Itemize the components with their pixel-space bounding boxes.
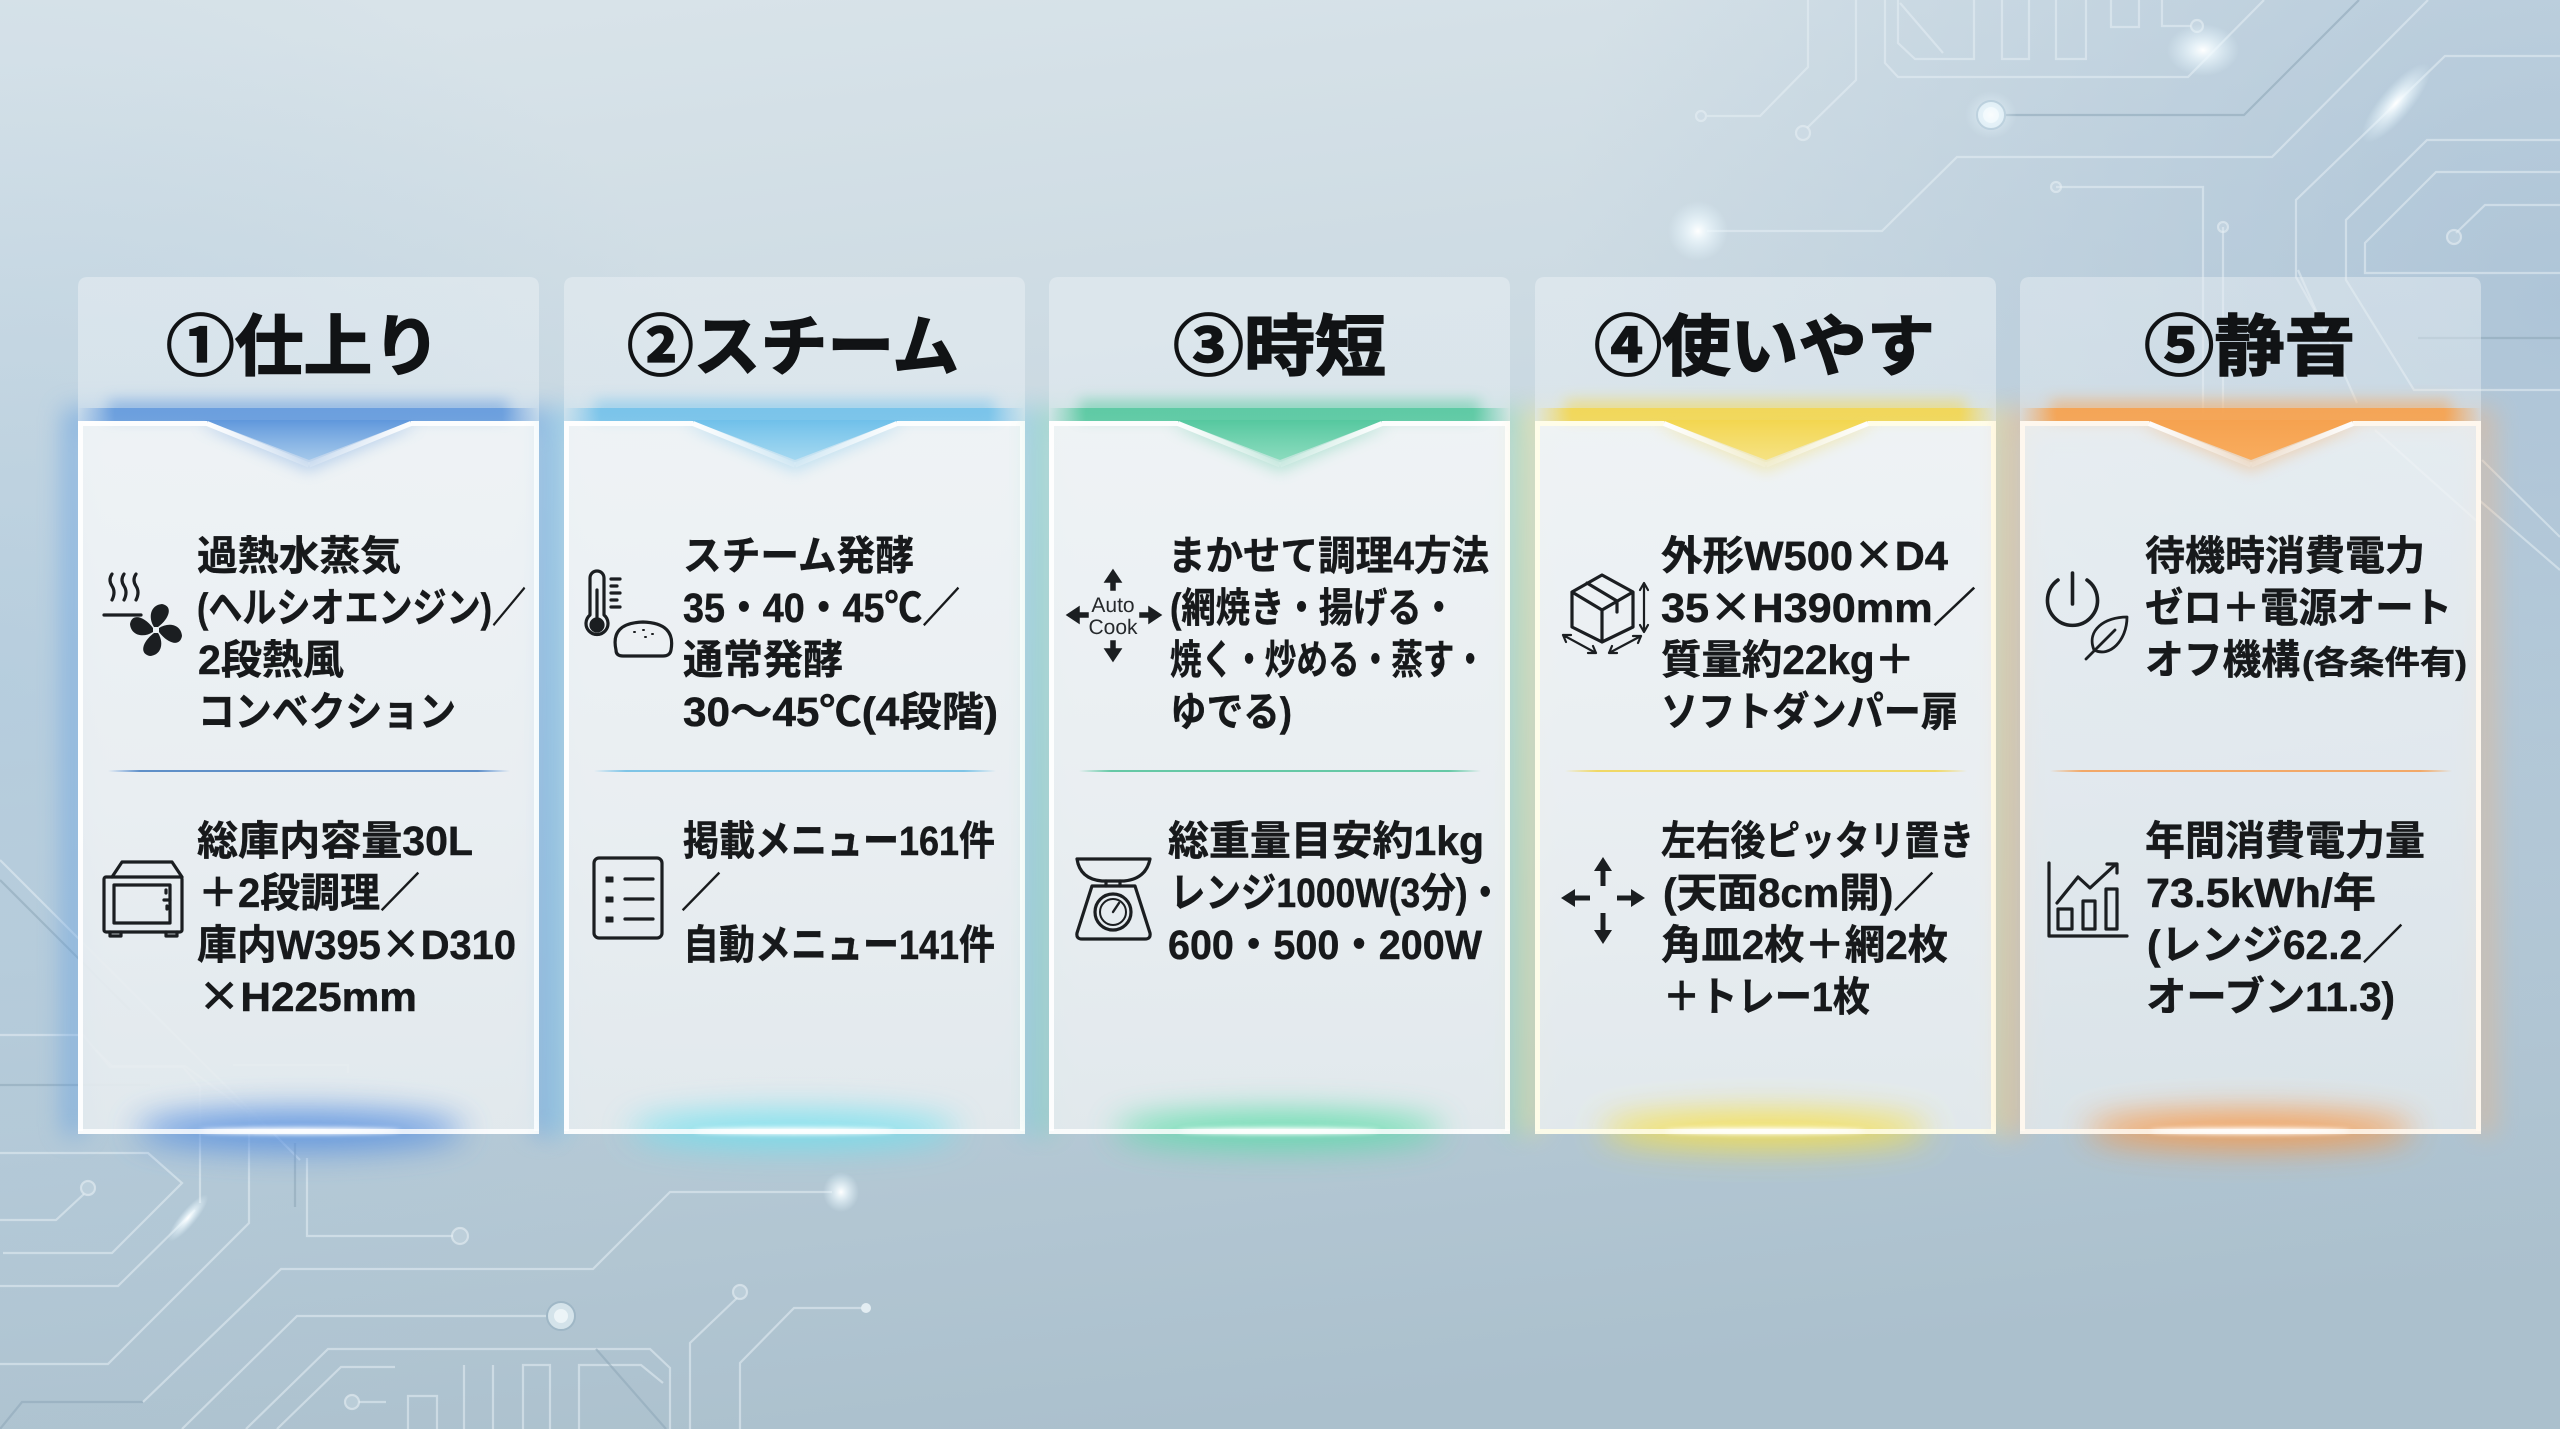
panel frame: sky blue [560,277,1029,1148]
panel: ⑤静音 [2016,277,2485,1148]
icon: four way arrows [1561,857,1645,944]
text: 左右後ピッタリ置き: 左右後ピッタリ置き [1661,818,1974,864]
icon: steam and fan [104,574,182,656]
text: 待機時消費電力: オフ機構 [2145,637,2300,683]
panel: ②スチーム [560,277,1029,1148]
text: 掲載メニュー [681,818,995,968]
text: 左右後ピッタリ置き: ＋トレー1枚 [1663,974,1870,1020]
text: 掲載メニュー: 自動メニュー141件 [683,922,995,968]
text: 過熱水蒸気: コンベクション [198,689,456,735]
text: 総庫内容量: 庫内W395×D310 [197,911,516,971]
panel frame: blue [74,277,543,1150]
text: スチーム発酵: 30～45℃(4段階) [683,689,998,735]
text: 待機時消費電力: 待機時消費電力 [2145,533,2425,579]
text: 年間消費電力量: (レンジ62.2／ [2147,922,2403,968]
panel: ①仕上り [74,277,543,1150]
icon: box with dimensions [1563,575,1648,653]
heading: ①仕上り: ①仕上り [166,293,441,390]
icon: kitchen scale [1077,859,1150,939]
text: スチーム発酵: 通常発酵 [683,637,843,683]
panel frame: yellow [1531,277,2000,1148]
icon: thermometer and bread [586,571,672,656]
text: まかせて調理: (網焼き・揚げる・ [1170,585,1456,631]
icon: power and leaf [2047,573,2127,659]
glowing flares [163,24,2440,1246]
text: 総庫内容量 [197,818,516,1023]
text: 過熱水蒸気 [197,533,526,735]
text: 待機時消費電力: (各条件有) [2302,644,2467,681]
text: 掲載メニュー: 掲載メニュー161件 [683,818,995,864]
text: 外形W500 [1661,522,1976,735]
panel frame: green [1045,277,1514,1148]
text: まかせて調理: まかせて調理4方法 [1168,533,1489,579]
heading: ②スチーム: ②スチーム [627,293,959,390]
divider [108,770,510,772]
text: まかせて調理: ゆでる) [1170,689,1292,735]
circuit traces: bottom left [0,860,871,1429]
label: Auto Cook: Auto [1091,594,1135,617]
icon: auto cook arrows: Cook [1088,616,1138,639]
text: 掲載メニュー: ／ [681,870,721,916]
text: 待機時消費電力: ゼロ＋電源オート [2145,585,2452,631]
panel: ④使いやす [1531,277,2000,1148]
divider [1565,770,1967,772]
text: 総重量目安 [1168,818,1503,968]
panel frame: orange [2016,277,2485,1148]
text: 年間消費電力量 [2145,818,2425,1020]
text: 左右後ピッタリ置き [1661,818,1974,1020]
circuit traces: top right [1696,0,2560,570]
text: 外形W500: 外形W500×D4 [1661,522,1948,582]
text: スチーム発酵: スチーム発酵 [683,533,914,579]
text: 総庫内容量: ×H225mm [198,963,417,1023]
text: 過熱水蒸気: 2段熱風 [198,637,344,683]
text: スチーム発酵 [683,533,998,735]
text: 年間消費電力量: 年間消費電力量 [2145,818,2425,864]
text: 総庫内容量: ＋2段調理／ [198,870,420,916]
divider [2050,770,2452,772]
text: まかせて調理: 焼く・炒める・蒸す・ [1170,637,1486,683]
divider [1079,770,1481,772]
text: 総重量目安: 600・500・200W [1168,922,1482,968]
divider [594,770,996,772]
text: 外形W500: 35×H390mm／ [1661,574,1976,634]
icon: bar chart with trend [2049,863,2127,936]
icon: oven [104,862,182,936]
text: 外形W500: ソフトダンパー扉 [1661,689,1958,735]
text: まかせて調理 [1168,533,1489,735]
heading: ③時短: ③時短 [1173,293,1386,390]
panel: ③時短 [1045,277,1514,1148]
text: 外形W500: 質量約22kg＋ [1661,637,1915,683]
text: 総庫内容量: 総庫内容量30L [197,818,473,864]
text: 過熱水蒸気: (ヘルシオエンジン)／ [197,585,526,631]
text: 総重量目安: レンジ1000W(3分)・ [1170,870,1503,916]
text: スチーム発酵: 35・40・45℃／ [683,585,960,631]
text: 総重量目安: 総重量目安約1kg [1168,818,1484,864]
text: 左右後ピッタリ置き: 角皿2枚＋網2枚 [1661,922,1948,968]
heading: ④使いやす: ④使いやす [1594,293,1935,390]
icon: auto cook arrows [1067,570,1161,661]
heading: ⑤静音: ⑤静音 [2144,293,2355,390]
text: 待機時消費電力 [2145,533,2467,683]
text: 過熱水蒸気: 過熱水蒸気 [197,533,401,579]
text: 左右後ピッタリ置き: (天面8cm開)／ [1663,870,1934,916]
text: 年間消費電力量: 73.5kWh/年 [2146,870,2376,916]
text: 年間消費電力量: オーブン11.3) [2146,974,2395,1020]
icon: menu list [594,858,662,938]
